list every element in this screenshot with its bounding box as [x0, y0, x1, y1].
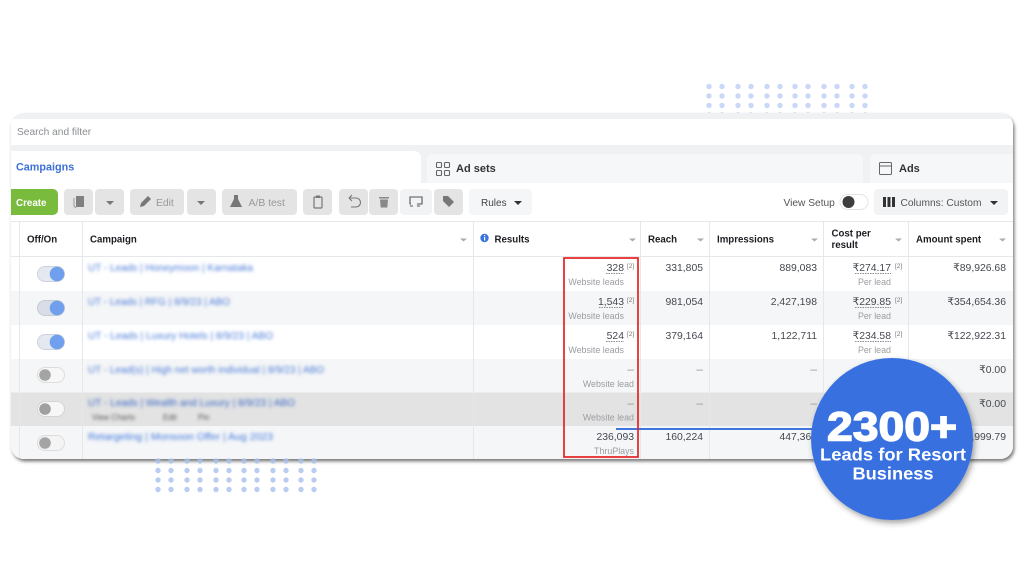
results column values: [2]	[627, 297, 634, 304]
cost per result column values: [2]	[895, 297, 902, 304]
button: create	[11, 189, 58, 215]
reach column values: –	[696, 362, 703, 376]
campaign toggles	[38, 266, 64, 450]
button: delete	[369, 189, 398, 215]
tab: campaigns	[11, 151, 421, 184]
table header: Off/On	[27, 234, 57, 246]
blurred campaign names: Pin	[198, 413, 210, 422]
cost per result column values: [2]	[895, 263, 902, 270]
cost per result column values: Per lead	[858, 345, 891, 355]
badge number: 2300+	[827, 404, 957, 450]
tab: ads: Ads	[899, 163, 920, 175]
cost per result column values: [2]	[895, 331, 902, 338]
button: edit: Edit	[156, 198, 174, 209]
table header: Reach	[648, 234, 677, 246]
button: create: Create	[16, 198, 47, 209]
table header: Cost per	[832, 228, 871, 240]
button: edit	[130, 189, 216, 215]
blurred campaign names: UT - Leads | Honeymoon | Karnataka	[88, 262, 253, 274]
amount spent column values: ₹0.00	[979, 365, 1006, 376]
cost per result column values: ₹234.58	[853, 331, 891, 342]
results column values: 524	[607, 331, 624, 342]
results column values: Website leads	[568, 277, 625, 287]
table header	[11, 221, 1013, 257]
amount spent column values: ₹0.00	[979, 399, 1006, 410]
reach column values: 331,805	[665, 263, 703, 274]
results column values	[568, 263, 635, 456]
button: a/b test: A/B test	[248, 198, 285, 209]
cost per result column values: Per lead	[858, 311, 891, 321]
reach column values	[665, 263, 703, 443]
badge caption: Leads for Resort	[820, 444, 966, 464]
results column values: [2]	[627, 263, 634, 270]
callout: 2300+ leads badge	[811, 358, 973, 520]
amount spent column values: ₹354,654.36	[947, 297, 1006, 308]
impressions column values: –	[810, 396, 817, 410]
button: report	[303, 189, 332, 215]
results column values: Website lead	[583, 379, 634, 389]
blurred campaign names: UT - Leads | Wealth and Luxury | 8/9/23 | ABO	[88, 397, 295, 409]
button: columns custom: Columns: Custom	[900, 198, 981, 209]
results column values: –	[627, 362, 634, 376]
table header: Campaign	[90, 234, 137, 246]
tab: ad sets	[436, 162, 496, 176]
impressions column values: 1,122,711	[772, 331, 817, 342]
panel: ads manager screenshot card	[5, 113, 1013, 459]
results column values: [2]	[627, 331, 634, 338]
reach column values: –	[696, 396, 703, 410]
impressions column values: 2,427,198	[771, 297, 817, 308]
search and filter bar	[11, 119, 1013, 145]
blurred campaign names: View Charts	[92, 413, 135, 422]
button: rules: Rules	[481, 198, 507, 209]
view setup toggle	[784, 194, 868, 210]
impressions column values	[771, 263, 817, 443]
view setup toggle: View Setup	[784, 198, 835, 209]
results column values: Website lead	[583, 412, 634, 422]
cost per result column values: ₹229.85	[853, 297, 891, 308]
button: duplicate	[64, 189, 124, 215]
results column values: –	[627, 396, 634, 410]
search and filter bar: Search and filter	[17, 127, 92, 138]
amount spent column values: ₹89,926.68	[953, 263, 1006, 274]
table header: result	[832, 240, 859, 251]
toolbar	[5, 183, 1013, 221]
button: undo	[339, 189, 368, 215]
decorative dots: bottom left	[155, 458, 317, 492]
button: rules	[469, 189, 532, 215]
amount spent column values: ₹122,922.31	[947, 331, 1006, 342]
blurred campaign names: UT - Leads | Luxury Hotels | 8/9/23 | ABO	[88, 330, 273, 342]
table rows	[11, 221, 1013, 459]
tab: ads	[879, 162, 920, 175]
blurred campaign names: UT - Leads | RFG | 8/9/23 | ABO	[88, 296, 230, 308]
tab: ad sets: Ad sets	[456, 163, 496, 175]
table header: Results	[494, 234, 530, 246]
button: tag	[434, 189, 463, 215]
tab: campaigns: Campaigns	[16, 162, 74, 174]
table header: Amount spent	[916, 234, 982, 246]
results column values: Website leads	[568, 345, 625, 355]
results column values: 236,093	[596, 432, 634, 443]
reach column values: 379,164	[665, 331, 703, 342]
decorative dots: top right	[706, 84, 868, 118]
results column values: Website leads	[568, 311, 625, 321]
results column values: 1,543	[598, 297, 624, 308]
button: columns custom	[874, 189, 1008, 215]
amount spent column values: ₹39,999.79	[953, 432, 1006, 443]
cost per result column values: Per lead	[858, 277, 891, 287]
table header: Impressions	[717, 234, 774, 246]
impressions column values: –	[810, 362, 817, 376]
amount spent column values	[947, 263, 1006, 443]
results column values: ThruPlays	[594, 446, 635, 456]
impressions column values: 889,083	[779, 263, 817, 274]
blurred campaign names: Edit	[163, 413, 178, 422]
reach column values: 981,054	[665, 297, 703, 308]
button: swap	[400, 189, 432, 215]
button: a/b test	[222, 189, 297, 215]
blurred campaign names	[88, 262, 324, 443]
cost per result column values: ₹274.17	[853, 263, 891, 274]
reach column values: 160,224	[665, 432, 703, 443]
cost per result column values	[853, 263, 902, 355]
results column values: 328	[607, 263, 624, 274]
blurred campaign names: UT - Lead(s) | High net worth individual | 8/9/23 | ABO	[88, 364, 324, 376]
badge caption: Business	[852, 464, 934, 484]
red highlight box around results	[564, 258, 638, 457]
badge caption	[820, 444, 966, 484]
blurred campaign names: Retargeting | Monsoon Offer | Aug 2023	[88, 431, 273, 443]
blue selection line	[616, 428, 816, 430]
impressions column values: 447,361	[779, 432, 817, 443]
